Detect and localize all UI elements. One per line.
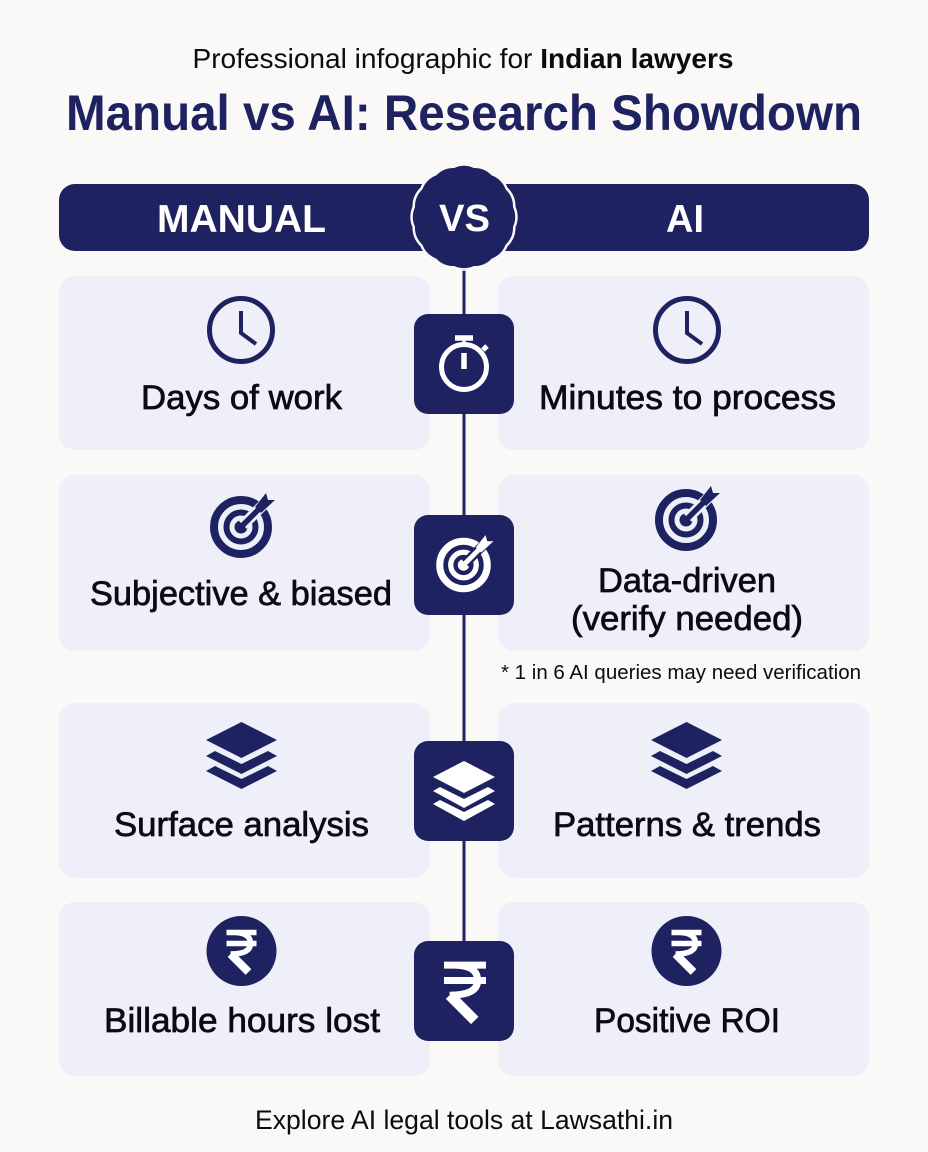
- center icon: layers: [414, 741, 514, 841]
- text: surface analysis: Surface analysis: [114, 806, 369, 844]
- center icon: stopwatch: [414, 314, 514, 414]
- text: patterns and trends: Patterns & trends: [553, 806, 821, 844]
- icon: clock manual: [210, 298, 272, 362]
- icon: layers manual: [206, 722, 277, 789]
- panel: row 4 ai: [498, 902, 869, 1076]
- icon: rupee ai: [652, 916, 722, 986]
- icon: target ai: [659, 486, 720, 547]
- panel: row 1 ai: [498, 276, 869, 450]
- icon: layers ai: [651, 722, 722, 789]
- icon: target manual: [214, 493, 275, 554]
- panel: row 4 manual: [59, 902, 430, 1076]
- header bar: [59, 184, 869, 251]
- icon: rupee manual: [206, 916, 276, 986]
- footnote: * 1 in 6 AI queries may need verification: [501, 662, 861, 684]
- text: days of work: Days of work: [141, 379, 343, 417]
- text: verify needed: (verify needed): [571, 600, 803, 638]
- panel: row 2 ai: [498, 475, 869, 651]
- text: positive roi: Positive ROI: [594, 1002, 780, 1040]
- heading: ai: AI: [666, 198, 704, 241]
- timeline connector: [462, 262, 466, 952]
- center icon: target: [414, 515, 514, 615]
- text: data-driven: Data-driven: [598, 562, 776, 600]
- center icon: rupee: [414, 941, 514, 1041]
- panel: row 2 manual: [59, 475, 430, 651]
- panel: row 3 manual: [59, 703, 430, 878]
- panel: row 3 ai: [498, 703, 869, 878]
- vs badge: [413, 166, 515, 268]
- icon: clock ai: [656, 298, 718, 362]
- text: minutes to process: Minutes to process: [539, 379, 836, 417]
- text: subjective and biased: Subjective & biased: [90, 575, 392, 613]
- text: billable hours lost: Billable hours lost: [104, 1002, 381, 1040]
- footer: Explore AI legal tools at Lawsathi.in: [255, 1105, 673, 1135]
- panel: row 1 manual: [59, 276, 430, 450]
- subtitle: Professional infographic for Indian lawyers: [192, 43, 734, 74]
- title: Manual vs AI: Research Showdown: [66, 85, 862, 141]
- text: vs: VS: [439, 198, 490, 240]
- heading: manual: MANUAL: [157, 198, 326, 241]
